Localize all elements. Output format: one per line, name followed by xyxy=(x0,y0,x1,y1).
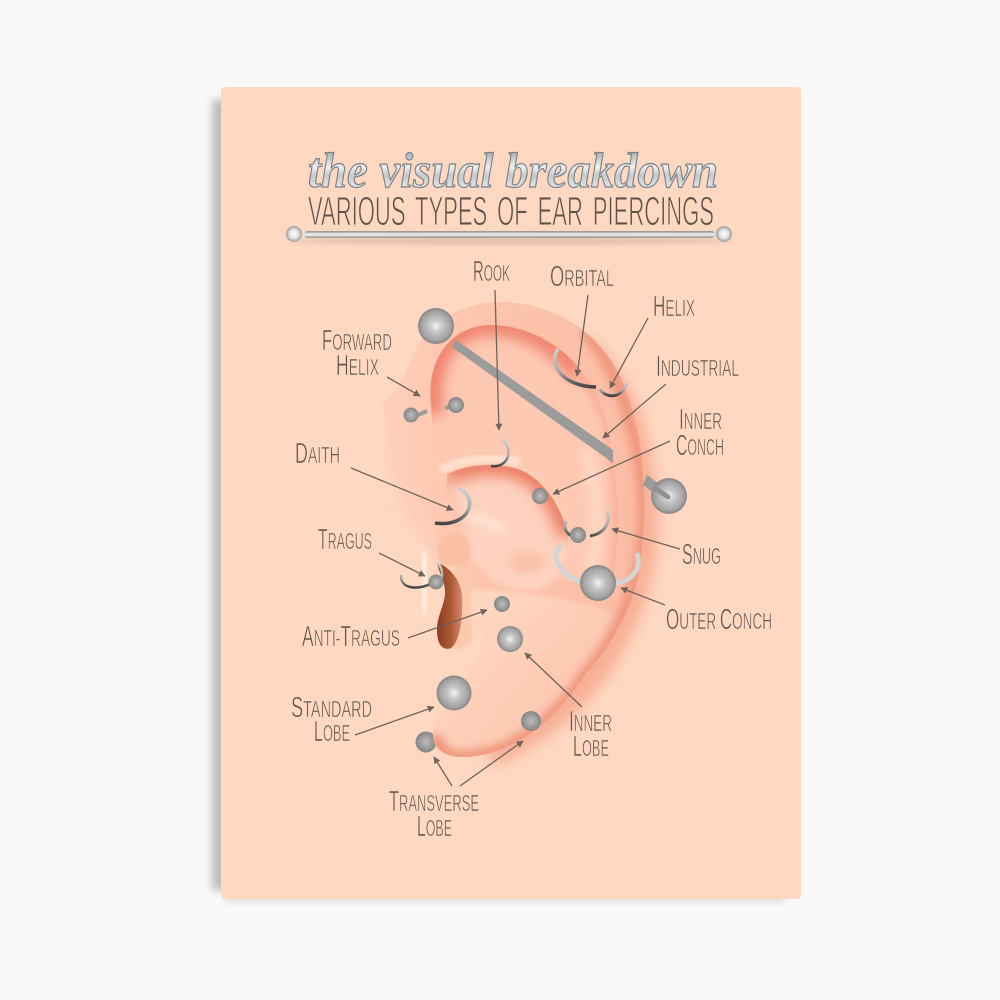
label: Inner Lobe: INNER xyxy=(569,706,612,738)
label: Outer Conch: OUTER CONCH xyxy=(666,604,772,636)
crus highlight xyxy=(440,459,520,470)
label: Snug: SNUG xyxy=(682,539,721,571)
helix ring xyxy=(600,382,627,396)
ear cast shadow xyxy=(480,335,658,765)
daith ring xyxy=(435,488,470,524)
label: Transverse Lobe: LOBE xyxy=(417,811,452,843)
anti-tragus stud xyxy=(494,596,510,612)
concha coral edge xyxy=(447,465,568,535)
inner lobe stud xyxy=(497,626,523,652)
soft face area xyxy=(388,415,470,570)
outer conch ring xyxy=(556,545,638,601)
label: Inner Conch: INNER xyxy=(679,404,722,436)
ear silhouette xyxy=(381,302,644,757)
label: Forward Helix xyxy=(322,325,392,382)
label: Inner Lobe: LOBE xyxy=(573,731,609,763)
lobe fill xyxy=(433,590,612,745)
label: Daith: DAITH xyxy=(295,438,340,470)
standard lobe stud xyxy=(436,676,472,710)
transverse lobe stud xyxy=(521,711,541,731)
label: Industrial: INDUSTRIAL xyxy=(656,351,739,383)
industrial barbell xyxy=(418,308,687,514)
orbital ring xyxy=(555,349,596,387)
snug ring xyxy=(565,510,608,543)
concha pale streak xyxy=(468,515,505,530)
tragus xyxy=(437,533,470,566)
ear canal xyxy=(437,563,462,649)
label: Orbital: ORBITAL xyxy=(550,261,614,293)
forward helix studs xyxy=(404,397,464,422)
antihelix ridge xyxy=(585,450,597,570)
label arrows xyxy=(351,290,680,786)
label: Forward Helix: FORWARD xyxy=(322,325,392,357)
label: Anti-Tragus: ANTI-TRAGUS xyxy=(302,621,400,653)
panel: poster xyxy=(221,87,801,899)
label: Transverse Lobe xyxy=(389,786,479,843)
canal highlight xyxy=(423,552,425,612)
scapha: inner helix xyxy=(430,325,618,590)
poster shadow xyxy=(212,100,785,902)
label: Tragus: TRAGUS xyxy=(318,524,372,556)
label: Standard Lobe: STANDARD xyxy=(291,692,372,724)
ear outer edge shading xyxy=(436,330,644,757)
label: Standard Lobe xyxy=(291,692,372,748)
label: Helix: HELIX xyxy=(653,291,695,323)
tragus ring xyxy=(401,563,444,590)
label: Inner Lobe xyxy=(569,706,612,763)
inner conch stud xyxy=(532,488,548,504)
rook ring xyxy=(491,439,508,466)
label: Transverse Lobe: TRANSVERSE xyxy=(389,786,479,818)
label: Inner Conch xyxy=(676,404,724,462)
label: Standard Lobe: LOBE xyxy=(314,716,350,748)
ear illustration xyxy=(381,302,658,765)
title barbell xyxy=(286,226,732,245)
transverse lobe ball xyxy=(416,732,436,752)
label: Inner Conch: CONCH xyxy=(676,430,724,462)
antitragal notch xyxy=(509,552,545,572)
label: Rook: ROOK xyxy=(473,256,510,288)
tragus column xyxy=(450,565,472,649)
inner rim shading xyxy=(432,325,618,590)
title: script heading: the visual breakdown xyxy=(308,142,718,198)
concha bowl base xyxy=(447,465,569,590)
label: Forward Helix: HELIX xyxy=(336,350,379,382)
